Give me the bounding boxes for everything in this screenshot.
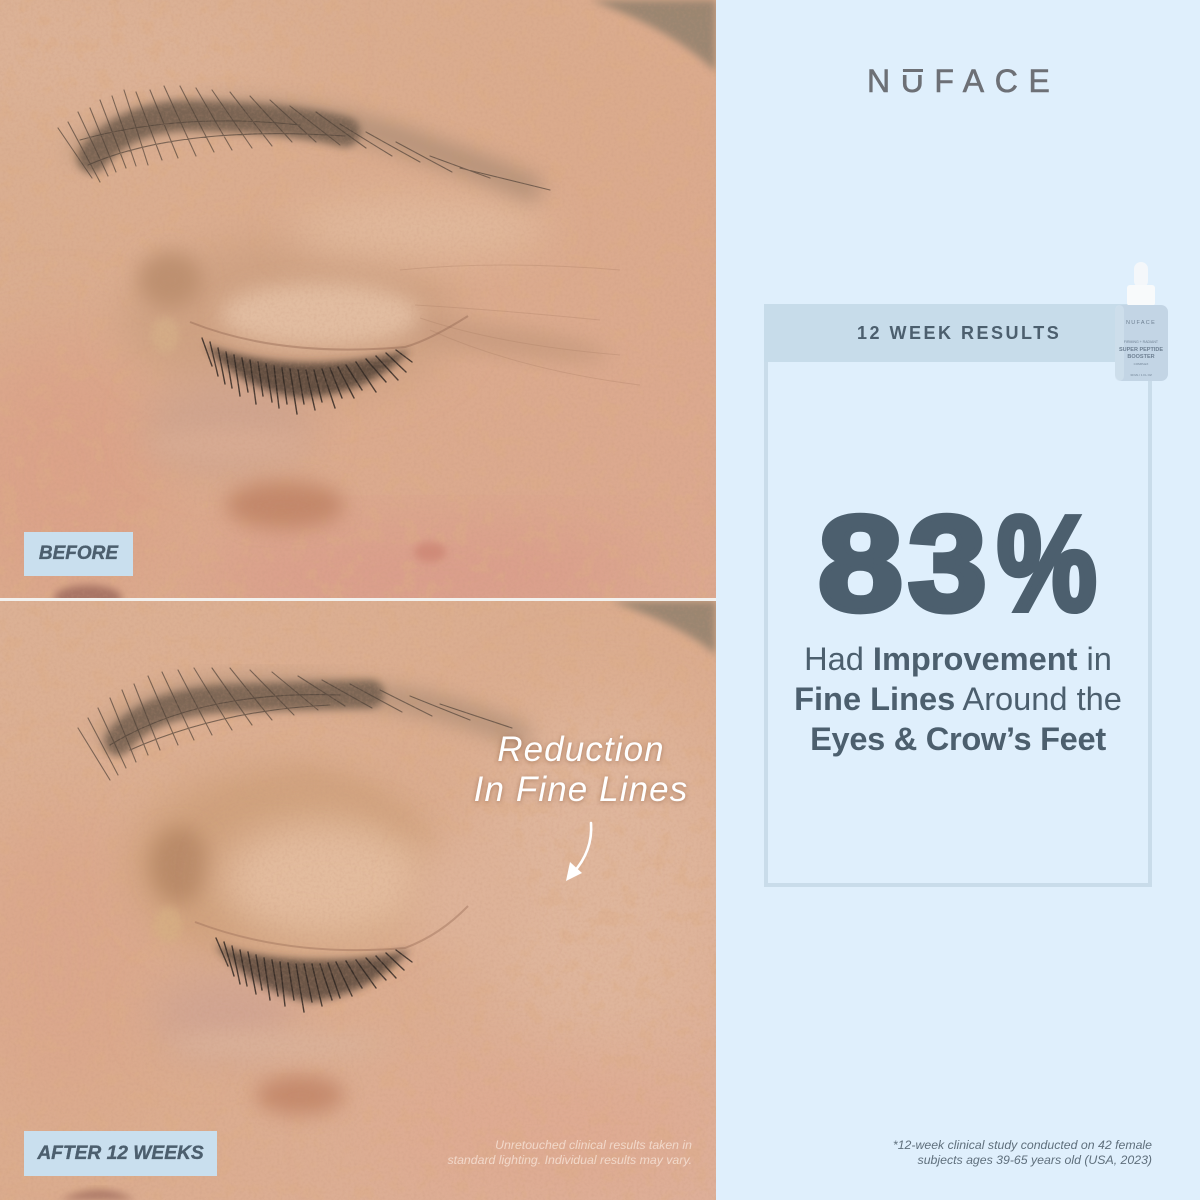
panel: before and after photographs (0, 0, 716, 1200)
crow's feet lines (400, 265, 640, 385)
bottle label: BOOSTER (1127, 354, 1155, 360)
statistic description: Fine Lines Around the (794, 680, 1122, 717)
statistic description: Had Improvement in (804, 640, 1112, 677)
bottle label: COMPLEX (1134, 362, 1148, 366)
bottle label: NUFACE (1126, 320, 1156, 326)
statistic: 83%: 8 (818, 488, 903, 639)
arrow: pointing to fine lines (566, 822, 592, 881)
bottle label: FIRMING + RADIANT (1124, 340, 1159, 344)
statistic description (794, 640, 1122, 757)
eyelid highlight (220, 283, 420, 347)
disclaimer: photo note: Unretouched clinical results taken in (495, 1138, 692, 1152)
panel: right side background (716, 0, 1200, 1200)
card outline (764, 304, 1152, 887)
callout: reduction in fine lines (474, 730, 688, 808)
hair corner (610, 601, 716, 655)
logo: NuFACE: NUFACE (867, 63, 1060, 99)
nose shadow (52, 582, 125, 598)
divider between photos (0, 598, 716, 601)
eyebrow (58, 86, 550, 190)
footnote: clinical study: *12-week clinical study conducted on 42 female (893, 1138, 1152, 1152)
callout: reduction in fine lines: Reduction (497, 730, 665, 769)
footnote: clinical study (893, 1138, 1152, 1167)
after photo (0, 601, 730, 1200)
socket shadow (130, 770, 430, 960)
icon: product bottle (1115, 262, 1168, 381)
disclaimer: photo note: standard lighting. Individual results may vary. (448, 1153, 692, 1167)
card header band (764, 304, 1152, 362)
eyelid highlight (220, 820, 430, 940)
statistic: 83%: 3 (908, 488, 987, 639)
socket shadow (134, 248, 442, 378)
logo macron (903, 69, 923, 72)
under-eye discolouration (225, 481, 345, 529)
results card (764, 304, 1152, 887)
label: after 12 weeks: AFTER 12 WEEKS (37, 1143, 204, 1164)
logo macron gap (901, 71, 929, 75)
card heading: 12 WEEK RESULTS (857, 323, 1061, 343)
nose shadow (60, 1190, 135, 1200)
label: before (24, 532, 133, 576)
label: before: BEFORE (39, 543, 118, 564)
statistic: 83% (818, 488, 1097, 639)
eyebrow (78, 668, 520, 780)
bottle label: 30 ML / 1 FL OZ (1130, 373, 1152, 377)
bottle label (1119, 320, 1163, 377)
callout: reduction in fine lines: In Fine Lines (474, 770, 688, 808)
statistic: 83%: % (997, 488, 1097, 639)
label: after 12 weeks (24, 1131, 217, 1176)
under-eye discolouration (255, 1075, 345, 1115)
before photo (0, 0, 716, 615)
bottle label: SUPER PEPTIDE (1119, 347, 1163, 353)
closed eye crease and lashes (190, 316, 468, 350)
statistic description: Eyes & Crow’s Feet (810, 720, 1106, 757)
closed eye crease and lashes (195, 906, 468, 950)
disclaimer: photo note (448, 1138, 692, 1167)
footnote: clinical study: subjects ages 39-65 years old (USA, 2023) (918, 1153, 1152, 1167)
hair corner (590, 0, 716, 72)
